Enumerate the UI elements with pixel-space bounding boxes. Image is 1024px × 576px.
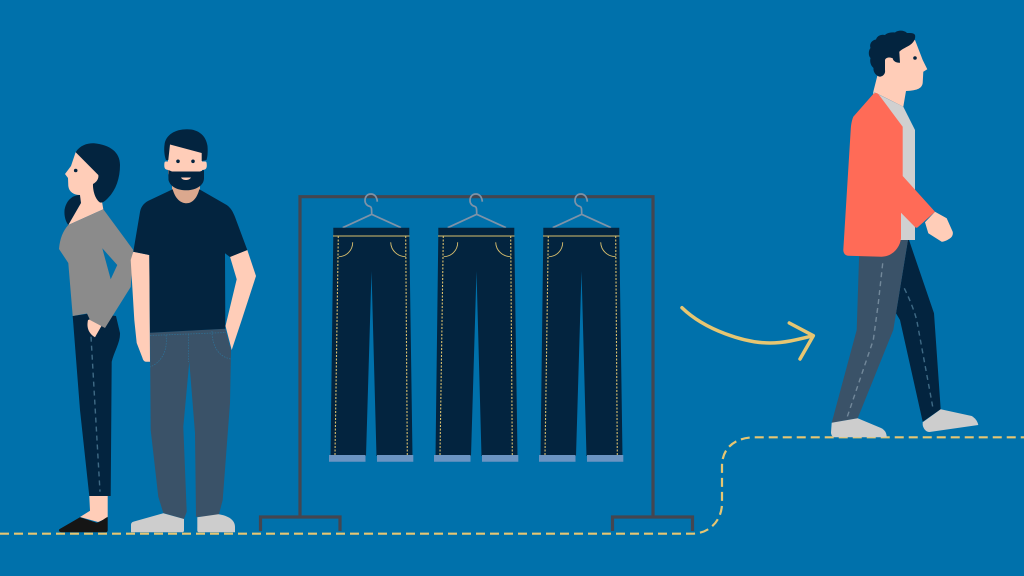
jeans on hanger 3 — [539, 194, 623, 462]
man eyes — [176, 160, 195, 163]
man jeans — [150, 329, 231, 519]
jeans 2 body — [436, 228, 518, 456]
clothes rack — [260, 197, 692, 531]
man neck — [172, 180, 200, 204]
dashed ground path — [0, 437, 1024, 534]
jeans 1 gold stitching — [333, 236, 410, 455]
walking man front leg seam — [847, 263, 883, 417]
man shoes — [131, 513, 184, 532]
woman hair — [76, 143, 120, 203]
walking man hair — [869, 31, 915, 77]
jeans 2 gold stitching — [438, 236, 514, 455]
jeans on hanger 1 — [329, 194, 413, 462]
walking man front leg — [832, 238, 908, 423]
jeans 3 hems — [539, 455, 623, 462]
woman jeans seam — [91, 337, 100, 492]
jeans 3 body — [540, 228, 622, 456]
walking man back shoe — [923, 409, 978, 432]
walking man head and neck — [873, 40, 927, 107]
walking man back leg seam — [904, 288, 933, 410]
jeans 1 body — [330, 228, 412, 456]
arrow — [682, 308, 813, 359]
woman hand — [87, 318, 102, 337]
man face — [168, 144, 202, 184]
woman sweater fold shadow — [102, 248, 111, 279]
walking man t-shirt — [873, 92, 915, 240]
man hair — [164, 129, 208, 161]
walking man hand — [925, 212, 953, 242]
man standing — [131, 129, 256, 532]
woman — [59, 143, 133, 532]
man beard — [168, 170, 204, 190]
man t-shirt — [133, 189, 247, 333]
walking man eye — [913, 56, 917, 60]
hanger 3 — [553, 194, 611, 228]
jeans 1 hems — [329, 455, 413, 462]
woman ponytail — [64, 195, 82, 225]
woman neck and face — [65, 152, 103, 225]
walking man front shoe — [831, 418, 887, 437]
woman shoe — [59, 517, 108, 532]
jeans 2 hems — [434, 455, 518, 462]
walking man back leg — [896, 238, 941, 422]
woman sweater — [59, 209, 133, 328]
man ears — [164, 162, 207, 170]
man walking — [831, 31, 978, 437]
man mouth — [181, 178, 191, 180]
hanger 2 — [448, 194, 506, 228]
jeans 3 gold stitching — [543, 236, 620, 455]
hanger 1 — [343, 194, 401, 228]
man right arm — [226, 250, 256, 350]
man right shoe — [197, 514, 235, 532]
man left arm — [131, 252, 150, 362]
jeans on hanger 2 — [434, 194, 518, 462]
woman ankle — [80, 496, 108, 522]
woman eye — [74, 169, 77, 172]
walking man cardigan — [843, 93, 935, 257]
man jeans stitching — [150, 331, 231, 367]
woman jeans — [73, 313, 120, 496]
